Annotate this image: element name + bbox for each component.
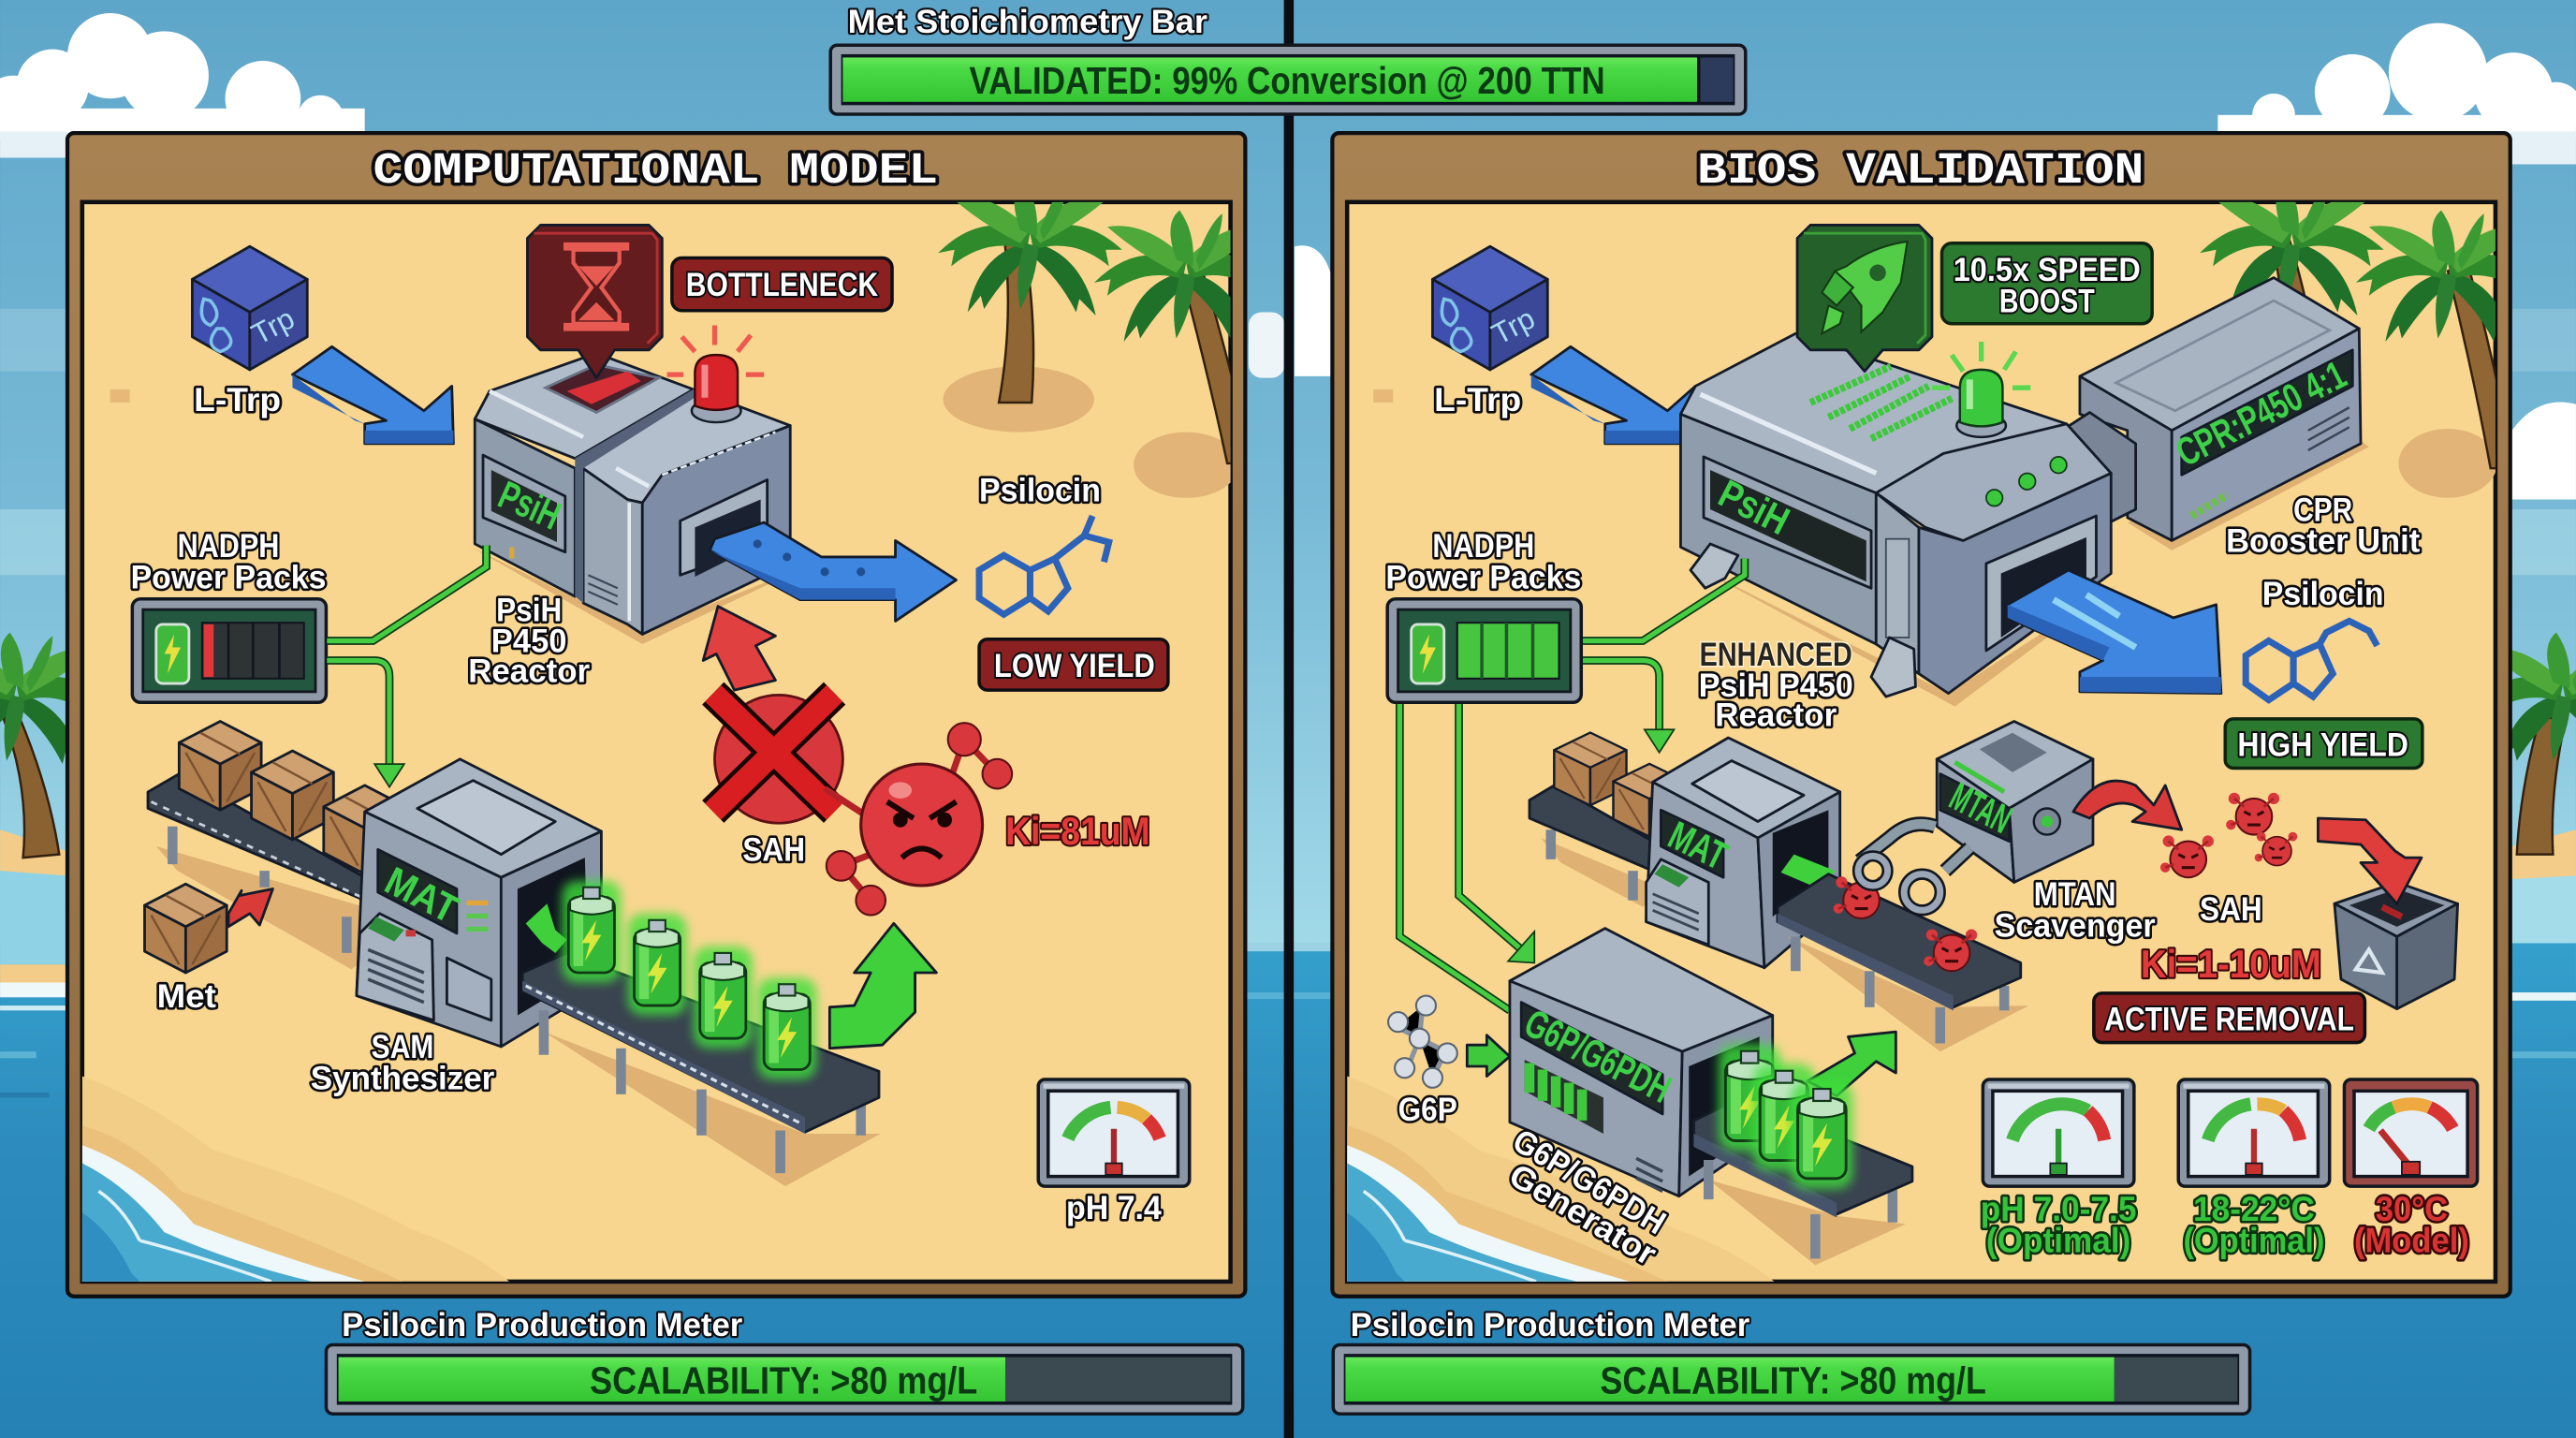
center strip: [1876, 493, 1919, 674]
PsiH screen: [1704, 457, 1871, 588]
center divider: [1284, 0, 1294, 1438]
panel frame: [1332, 133, 2510, 1297]
meter label: Psilocin Production Meter: [342, 1307, 743, 1343]
green vents: [1810, 366, 1954, 439]
G6P molecule: [1388, 996, 1457, 1088]
MAT screen: [1661, 810, 1734, 878]
red SAH on belt: [1834, 876, 1977, 971]
Met crate: [145, 884, 227, 973]
meter label: Psilocin Production Meter: [1351, 1307, 1749, 1343]
SAH label: SAH: [742, 832, 805, 869]
green arrow: G6P in: [1467, 1035, 1510, 1077]
L-Trp cube: Trp: [1486, 301, 1540, 351]
speed boost badge: [1942, 243, 2152, 324]
red arrow: inhibition: [703, 607, 775, 690]
L-Trp cube: Trp: [246, 301, 300, 351]
speed boost badge: 10.5x SPEED: [1954, 252, 2141, 288]
blocked SAH with X: [713, 694, 842, 823]
palm trees and shadow: [2200, 202, 2496, 498]
reactor label: P450: [491, 624, 567, 660]
palm: right shore: [2471, 633, 2576, 855]
panel: BIOS validation: [1332, 133, 2539, 1297]
red arrow: into bin: [2318, 818, 2422, 903]
green arrow: into synthesizer: [526, 903, 567, 953]
MTAN screen: MTAN: [1943, 774, 2019, 842]
model temperature label: (Model): [2354, 1221, 2469, 1259]
NADPH label: Power Packs: [1385, 559, 1581, 595]
CPR label: Booster Unit: [2226, 523, 2421, 560]
arrow: substrate into reactor: [1531, 346, 1695, 444]
green arrow: fuelled return: [829, 923, 936, 1049]
MAT screen: MAT: [1661, 813, 1734, 878]
exit slot: [1986, 516, 2096, 651]
bottleneck badge: BOTTLENECK: [686, 267, 879, 303]
reactor label: PsiH: [496, 592, 562, 628]
center strip: [583, 468, 642, 634]
bottleneck badge: [672, 258, 892, 311]
psilocin meter: left: SCALABILITY: >80 mg/L: [590, 1358, 977, 1401]
G6P/G6PDH generator: [1510, 929, 1773, 1196]
reactor label: Reactor: [1715, 697, 1837, 734]
reactor label: PsiH P450: [1699, 668, 1853, 704]
pH label: pH 7.0-7.5: [1981, 1190, 2136, 1228]
green arrow: output: [1808, 1032, 1895, 1096]
right face: [642, 426, 790, 634]
status lamps: [1986, 457, 2067, 506]
SAM label: Synthesizer: [311, 1061, 495, 1097]
beach and water: [1347, 1077, 1774, 1282]
trash bin: [2334, 882, 2458, 1009]
arrow: substrate into reactor: [292, 346, 453, 444]
panel frame: [67, 133, 1245, 1297]
gauge: pH 7.4: [1038, 1079, 1190, 1186]
gauge: temperature: [2178, 1079, 2330, 1186]
CPR display: [2169, 350, 2353, 475]
NADPH label: Power Packs: [131, 559, 326, 595]
psilocin label: Psilocin: [2262, 576, 2384, 612]
L-Trp label: L-Trp: [1434, 382, 1521, 418]
SAH label: SAH: [2200, 891, 2262, 928]
top heat window: [546, 365, 659, 413]
temperature label: [2183, 1190, 2324, 1259]
feet: [1690, 544, 1738, 588]
green lines: power distribution: [1399, 559, 1745, 1010]
temperature label: (Optimal): [2183, 1221, 2324, 1259]
speed boost badge: BOOST: [1999, 283, 2095, 319]
high yield badge: [2225, 719, 2422, 768]
panel title: COMPUTATIONAL MODEL: [373, 147, 938, 197]
panel title: BIOS VALIDATION: [1697, 147, 2144, 197]
gauge: model temperature: [2344, 1079, 2478, 1186]
G6P screen: [1518, 1001, 1678, 1114]
connector to reactor: [2062, 413, 2136, 526]
low yield badge: LOW YIELD: [994, 648, 1155, 684]
psilocin label: Psilocin: [979, 472, 1101, 508]
SAH conveyor: [1778, 874, 2029, 1051]
G6P screen: G6P/G6PDH: [1518, 1001, 1678, 1111]
cloud: top left: [0, 13, 365, 157]
NADPH label: [1385, 528, 1581, 595]
MTAN label: Scavenger: [1995, 907, 2156, 944]
PsiH screen: [483, 455, 567, 552]
temperature label: 18-22°C: [2193, 1190, 2315, 1228]
cloud: top right: [2217, 23, 2576, 165]
top left block: [475, 353, 694, 459]
PsiH screen: PsiH: [1712, 471, 1796, 543]
MTAN screen: [1940, 774, 2019, 842]
psilocin meter: left: [326, 1307, 1243, 1414]
MTAN label: [1995, 876, 2156, 944]
L-Trp cube: [192, 246, 307, 370]
arrow: high output: [2008, 570, 2221, 694]
stoichiometry label: Met Stoichiometry Bar: [848, 4, 1208, 40]
MTAN scavenger machine: [1937, 721, 2093, 882]
reactor label: [1699, 637, 1853, 734]
right face: [1919, 473, 2111, 694]
output slot: [681, 479, 768, 577]
model temperature label: 30°C: [2376, 1190, 2448, 1228]
green line: power to reactor: [327, 546, 487, 640]
active removal badge: ACTIVE REMOVAL: [2104, 1001, 2354, 1037]
MAT synthesizer: [1647, 738, 1840, 968]
seam: [575, 389, 700, 603]
MAT SAM synthesizer: [357, 759, 601, 1047]
main top: [1680, 333, 2067, 493]
arrow: reactor to psilocin: [710, 522, 956, 621]
reactor label: ENHANCED: [1700, 637, 1852, 673]
SAH trio: [2160, 793, 2297, 877]
MAT screen: MAT: [378, 858, 466, 932]
reactor label: Reactor: [468, 653, 590, 689]
model temperature label: [2354, 1190, 2469, 1259]
SAM label: SAM: [372, 1029, 433, 1065]
pH label: pH 7.4: [1066, 1190, 1162, 1226]
icon: psilocin molecule: [2246, 621, 2378, 700]
small pebble: [1373, 389, 1393, 403]
claw arms: [1858, 824, 1969, 910]
generator conveyor: [1693, 1097, 1912, 1265]
control panel: [1647, 859, 1708, 945]
beach and water: [82, 1077, 509, 1282]
Ki value: Ki=81uM: [1005, 809, 1150, 853]
pH label: (Optimal): [1986, 1221, 2130, 1259]
NADPH label: NADPH: [1432, 528, 1534, 565]
icon: psilocin molecule: [979, 516, 1109, 614]
stoichiometry bar: [830, 4, 1746, 114]
active removal badge: [2094, 993, 2364, 1043]
palm: left shore: [0, 633, 109, 858]
SAM label: [311, 1029, 495, 1097]
generator batteries: [1719, 1044, 1853, 1189]
panel: computational model: [67, 133, 1278, 1297]
Met conveyor and crates: [148, 721, 406, 969]
generator label: Generator: [1503, 1157, 1662, 1273]
NADPH label: [131, 528, 326, 595]
CPR label: CPR: [2293, 492, 2352, 528]
output conveyor: [522, 953, 881, 1186]
red arrow: ejected SAH: [2073, 781, 2182, 829]
psilocin meter: right: [1333, 1307, 2250, 1414]
green line: power to SAM synthesizer: [327, 661, 404, 787]
angry SAH molecule: [825, 723, 1012, 916]
NADPH battery box: [1387, 599, 1581, 702]
level bars: [1525, 1060, 1603, 1134]
generator label: G6P/G6PDH: [1507, 1123, 1672, 1241]
speech bubble: hourglass: [527, 225, 662, 378]
NADPH battery box: [132, 599, 326, 702]
speech bubble: rocket: [1797, 225, 1932, 372]
low yield badge: [979, 639, 1168, 690]
CPR label: [2226, 492, 2421, 560]
SAM batteries: [562, 881, 816, 1079]
high yield badge: HIGH YIELD: [2237, 726, 2408, 763]
stoichiometry bar: VALIDATED: 99% Conversion @ 200 TTN: [970, 59, 1605, 102]
L-Trp label: L-Trp: [194, 382, 281, 418]
green status light: [1932, 342, 2030, 437]
palm trees and shadows: [938, 202, 1231, 498]
MTAN label: MTAN: [2034, 876, 2116, 913]
L-Trp cube: [1432, 246, 1547, 370]
left face: [1680, 414, 1876, 644]
left face: [475, 419, 575, 596]
Met label: Met: [157, 978, 216, 1015]
gauge: pH: [1983, 1079, 2134, 1186]
front top: [1876, 424, 2111, 540]
PsiH screen: PsiH: [492, 473, 567, 538]
pH label: [1981, 1190, 2136, 1259]
red arrow: Met into belt: [228, 888, 272, 927]
PsiH P450 reactor: [468, 353, 805, 644]
Met conveyor and crates: [1530, 732, 1686, 907]
control panel: [357, 914, 433, 1020]
CPR booster unit: [2062, 278, 2369, 550]
reactor label: [468, 592, 590, 689]
red alarm light: [667, 325, 764, 422]
CPR display: CPR:P450 4:1: [2169, 352, 2353, 475]
Enhanced PsiH P450 reactor: [1680, 333, 2119, 707]
NADPH label: NADPH: [178, 528, 279, 565]
G6P label: G6P: [1398, 1092, 1457, 1128]
cloud: behind panels: [1249, 245, 2576, 500]
psilocin meter: right: SCALABILITY: >80 mg/L: [1600, 1358, 1986, 1401]
Ki value: Ki=1-10uM: [2141, 942, 2321, 986]
top right block: [578, 391, 790, 503]
small pebble: [110, 389, 130, 403]
